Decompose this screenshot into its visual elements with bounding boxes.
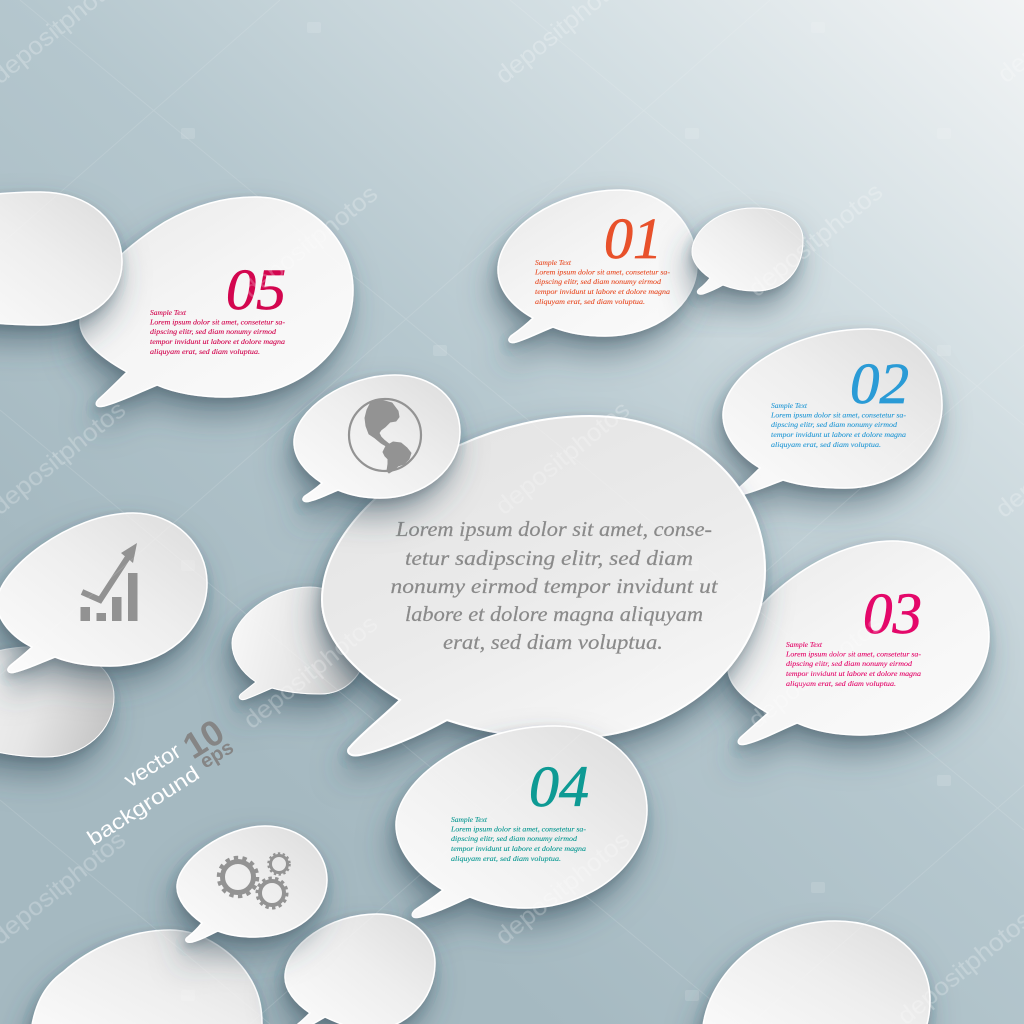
text 04: aliquyam erat, sed diam voluptua. [451,854,561,863]
main text: Lorem ipsum dolor sit amet, conse- [395,517,712,541]
main text: labore et dolore magna aliquyam [405,602,703,626]
bubble 04 [396,726,647,918]
bubble: small behind main [232,587,365,700]
watermark: depositphotos [743,178,888,303]
text 04: Sample Text [451,815,488,824]
bubble: chart [0,513,207,673]
text 03: Lorem ipsum dolor sit amet, consetetur sa- [785,650,921,658]
bubble 04 shape [396,726,647,918]
watermark: depositphotos [238,180,383,305]
text 01 [534,258,670,306]
main bubble [322,416,765,755]
bubble 02 [723,329,942,495]
text 02: tempor invidunt ut labore et dolore magna [771,430,906,439]
text 05: Lorem ipsum dolor sit amet, consetetur sa- [149,318,285,326]
text 03: dipscing elitr, sed diam nonumy eirmod [786,659,912,668]
number 01: 01 [604,206,662,271]
bubble: globe [294,375,460,502]
label: 10: 10 [176,711,231,767]
watermark: depositphotos [490,826,635,951]
text 03: tempor invidunt ut labore et dolore magna [786,669,921,678]
bubble 05 [80,197,353,407]
text 04 [450,815,586,863]
number 04: 04 [529,754,589,819]
bubble: bottom middle [285,914,435,1024]
bubble: small beside 01 [692,208,803,294]
text 03 [785,640,921,688]
bubble 01 [498,190,697,343]
text 01: dipscing elitr, sed diam nonumy eirmod [535,277,661,286]
text 01: Lorem ipsum dolor sit amet, consetetur sa- [534,268,670,276]
icon: growth chart [80,543,138,621]
text 04: tempor invidunt ut labore et dolore magna [451,844,586,853]
text 05: dipscing elitr, sed diam nonumy eirmod [150,327,276,336]
icon: globe [349,399,421,473]
label: background: background [83,762,204,850]
chart bubble shape [0,513,207,673]
bubble 03 [728,541,989,745]
text 02 [770,401,906,449]
gears bubble shape [177,826,327,942]
globe bubble shape [294,375,460,502]
label: vector: vector [119,738,185,792]
number 03: 03 [863,581,922,646]
text 02: Sample Text [771,401,808,410]
text 01: aliquyam erat, sed diam voluptua. [535,297,645,306]
bubble 03 shape [728,541,989,745]
bubble: lower left behind chart [0,647,114,757]
watermark: depositphotos [238,610,383,735]
main text [390,517,719,654]
text 01: Sample Text [535,258,572,267]
text 02: Lorem ipsum dolor sit amet, consetetur sa- [770,410,906,420]
text 02: aliquyam erat, sed diam voluptua. [771,440,881,449]
icon: gears [218,854,290,908]
text 01: tempor invidunt ut labore et dolore magna [535,287,670,296]
main text: tetur sadipscing elitr, sed diam [405,546,693,570]
number 02: 02 [850,351,909,416]
main text: erat, sed diam voluptua. [443,630,663,654]
label: eps: eps [196,736,238,773]
text 05 [149,308,285,356]
text 05: aliquyam erat, sed diam voluptua. [150,347,260,356]
text 05: Sample Text [150,308,187,317]
bubble: gears [177,826,327,942]
bubble: bottom left [30,930,262,1024]
text 04: Lorem ipsum dolor sit amet, consetetur sa- [450,824,586,834]
bubble: bottom right [702,921,930,1024]
bubble: top left [0,192,122,325]
text 02: dipscing elitr, sed diam nonumy eirmod [771,420,897,429]
bubble 01 shape [498,190,697,343]
text 03: aliquyam erat, sed diam voluptua. [786,679,896,688]
main text: nonumy eirmod tempor invidunt ut [390,574,719,598]
text 04: dipscing elitr, sed diam nonumy eirmod [451,834,577,843]
number 05: 05 [226,257,286,322]
bubble 05 shape [80,197,353,407]
text 05: tempor invidunt ut labore et dolore magna [150,337,285,346]
watermark: depositphotos [490,396,635,521]
main bubble shape [322,416,765,755]
label: vector background 10 eps [83,711,238,850]
text 03: Sample Text [786,640,823,649]
bubble 02 shape [723,329,942,495]
watermark: depositphotos [743,610,888,735]
